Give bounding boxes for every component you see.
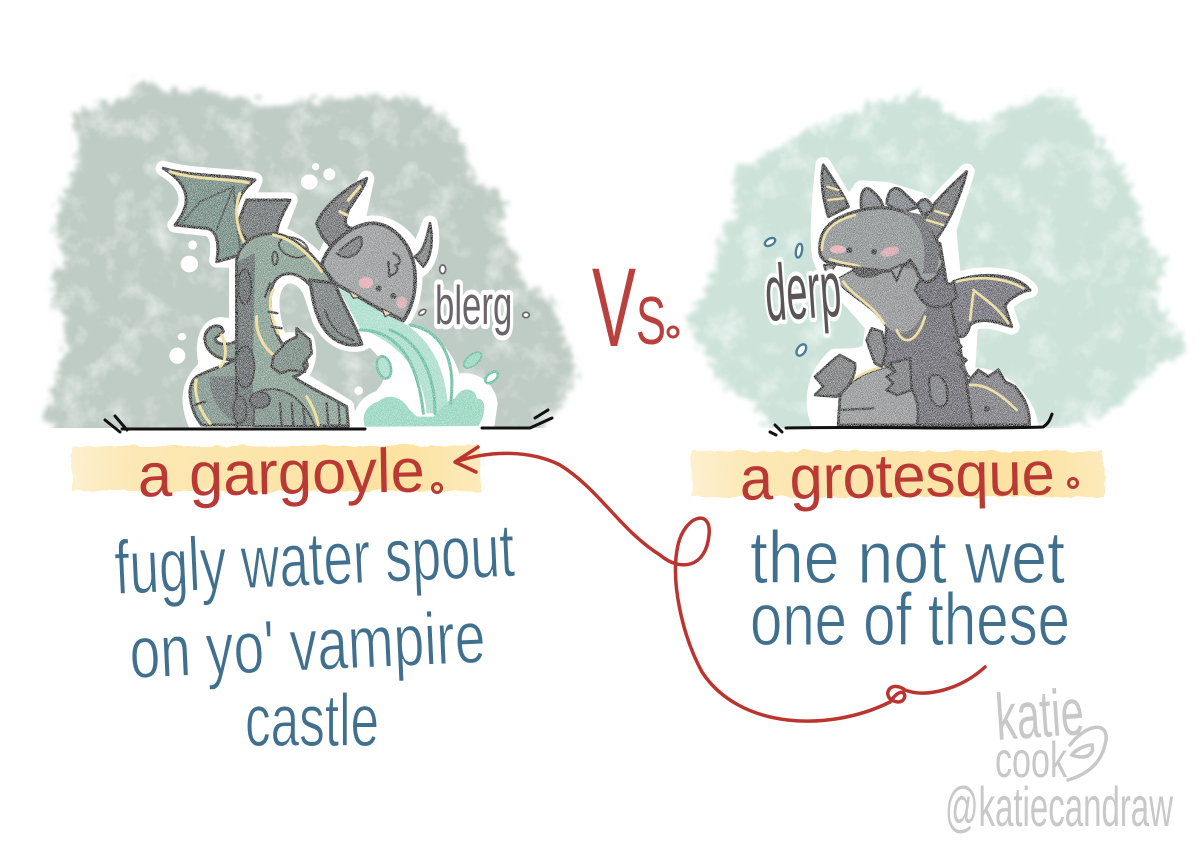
ground line left bbox=[105, 410, 552, 432]
gargoyle white sticker outline bbox=[163, 168, 490, 426]
grotesque crest bumps bbox=[861, 188, 933, 218]
white bubbles around gargoyle bbox=[169, 163, 363, 395]
arrow: red looping line from grotesque text to gargoyle label bbox=[455, 447, 985, 721]
text block: gargoyle description: fugly water spout bbox=[113, 508, 516, 611]
front wing bbox=[163, 168, 255, 262]
grotesque thigh bbox=[838, 367, 918, 425]
grotesque shoulder bbox=[915, 265, 957, 307]
tail lumps bbox=[953, 370, 1029, 425]
speech bubble: blerg bbox=[418, 265, 529, 336]
text block: gargoyle description: castle bbox=[245, 679, 379, 762]
grotesque drawing bbox=[815, 165, 1030, 425]
grotesque horns bbox=[822, 165, 848, 217]
heading: VS: V bbox=[592, 245, 636, 370]
speech bubble: derp bbox=[762, 236, 844, 357]
heading: VS: S bbox=[636, 283, 666, 359]
text block: gargoyle description bbox=[113, 508, 516, 762]
gargoyle claw hand bbox=[272, 328, 312, 373]
illustration: grotesque sitting: derp bbox=[762, 244, 844, 338]
gargoyle body bbox=[237, 233, 348, 426]
highlight band: grotesque bbox=[692, 451, 1104, 497]
heading: a grotesque: a grotesque bbox=[739, 439, 1055, 514]
gargoyle haunch bbox=[253, 389, 315, 426]
gargoyle horns bbox=[317, 178, 367, 253]
grotesque wing bbox=[937, 275, 1030, 337]
watermark: artist credit: katie bbox=[993, 674, 1086, 754]
tail bbox=[190, 326, 238, 425]
back wing bbox=[237, 200, 290, 250]
gargoyle lower jaw bbox=[310, 280, 362, 345]
illustration: grotesque sitting bbox=[762, 165, 1030, 425]
text block: grotesque description bbox=[750, 516, 1070, 661]
water stream from mouth bbox=[338, 288, 500, 427]
watermark: artist credit bbox=[945, 674, 1173, 838]
grotesque white sticker outline bbox=[815, 165, 1030, 425]
grotesque arms and claws bbox=[867, 328, 912, 395]
gargoyle drawing bbox=[163, 168, 432, 426]
panel: right mint paint wash bbox=[692, 98, 1176, 440]
highlight band: gargoyle bbox=[72, 446, 480, 491]
text block: grotesque description: one of these bbox=[750, 578, 1070, 661]
ground line right bbox=[770, 414, 1052, 435]
panel: left grey-green paint wash bbox=[54, 84, 580, 450]
text block: gargoyle description: on yo' vampire bbox=[128, 595, 487, 694]
heading: a gargoyle: a gargoyle bbox=[137, 436, 425, 510]
grotesque body bbox=[837, 243, 973, 425]
illustration: gargoyle spouting water bbox=[163, 163, 529, 427]
body spots bbox=[233, 233, 311, 423]
grotesque head bbox=[820, 208, 943, 282]
gargoyle head bbox=[322, 223, 415, 321]
speech bubble: blerg: blerg bbox=[435, 274, 512, 336]
text block: grotesque description: the not wet bbox=[750, 516, 1065, 599]
watermark: artist credit: cook bbox=[995, 732, 1068, 788]
